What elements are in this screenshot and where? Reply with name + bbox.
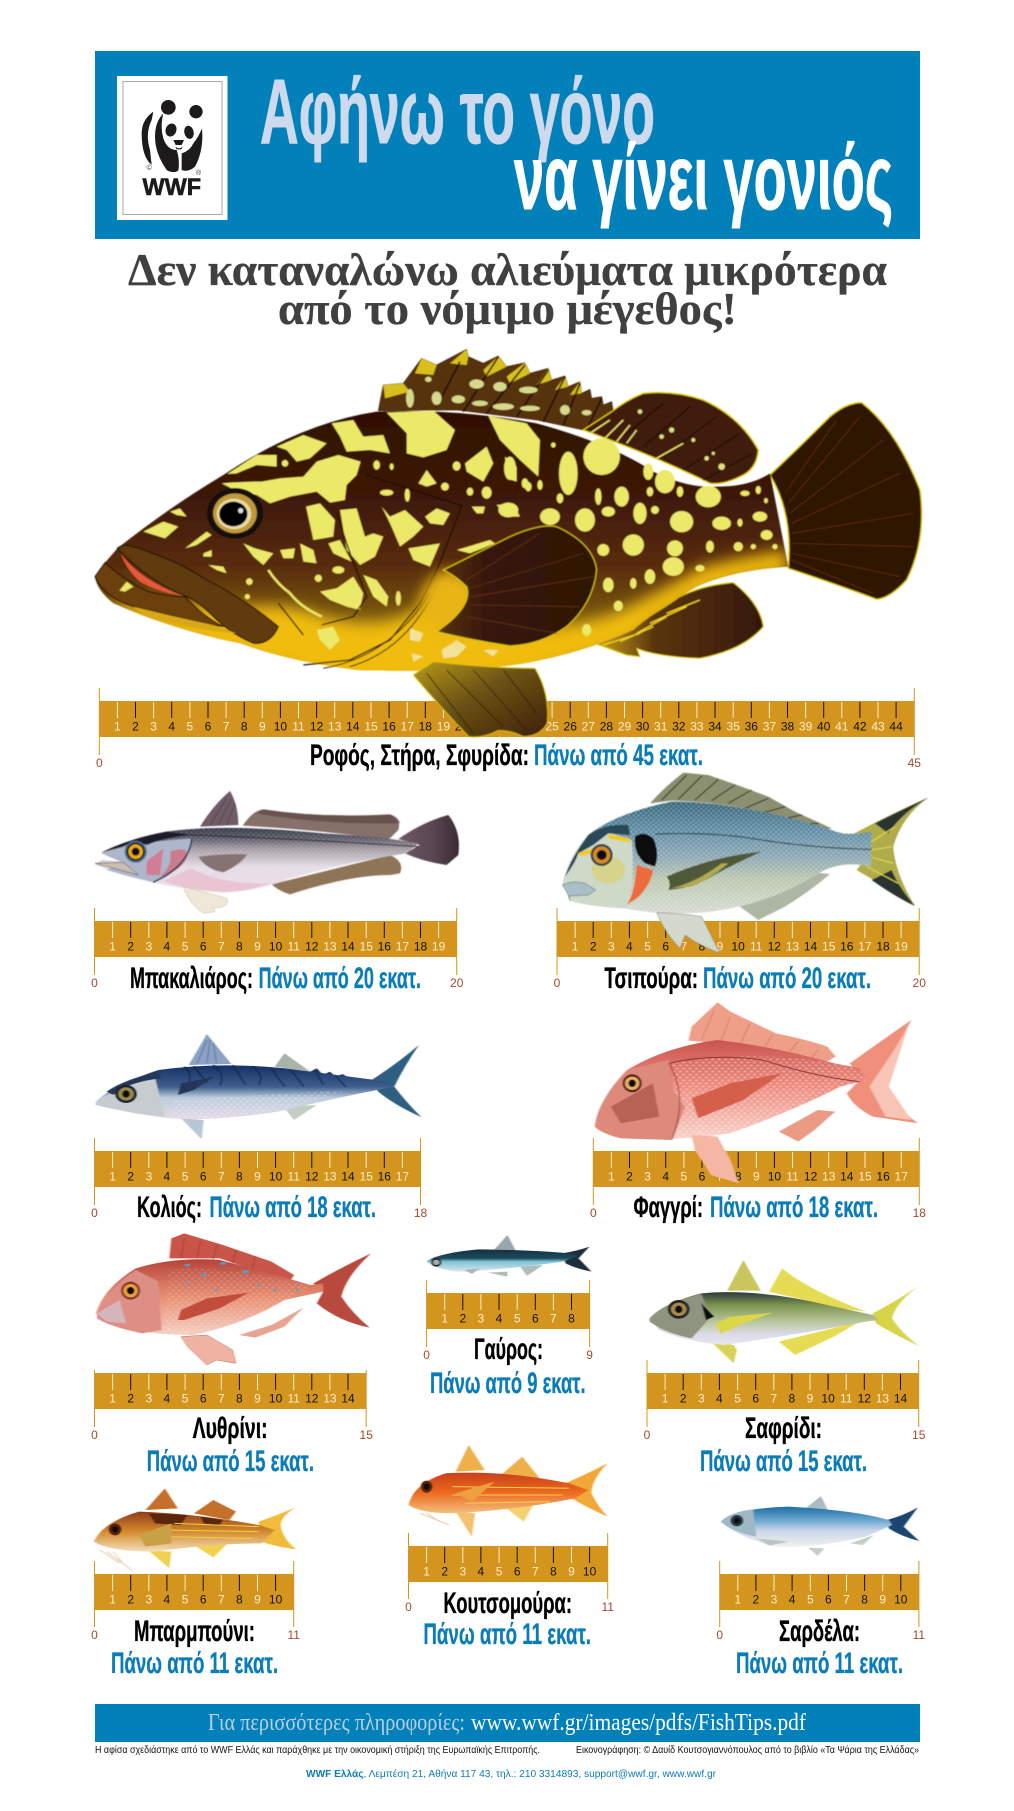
ruler: scad 15 cm: 15 <box>912 1428 926 1442</box>
ruler: red snapper 15 cm: 8 <box>236 1392 243 1406</box>
ruler: scad 15 cm: 0 <box>644 1428 651 1442</box>
ruler: 45 cm: 26 <box>564 720 577 734</box>
ruler: 45 cm: 2 <box>132 720 139 734</box>
ruler: 45 cm: 37 <box>763 720 776 734</box>
ruler: anchovy 9 cm: 5 <box>514 1312 521 1326</box>
subtitle <box>128 245 887 334</box>
ruler: sea bream 20 cm: 2 <box>590 940 597 954</box>
title line 1: Αφήνω το γόνο <box>260 61 655 163</box>
ruler: red mullet 11 cm: 2 <box>127 1592 134 1606</box>
ruler: red porgy 18 cm: 17 <box>895 1170 908 1184</box>
ruler: 45 cm: 6 <box>205 720 212 734</box>
ruler: red porgy 18 cm: 4 <box>662 1170 669 1184</box>
ruler: scad 15 cm: 9 <box>807 1392 814 1406</box>
ruler: red porgy 18 cm: 2 <box>626 1170 633 1184</box>
ruler: 45 cm: 31 <box>654 720 668 734</box>
ruler: mackerel 18 cm: 16 <box>378 1170 391 1184</box>
ruler: 45 cm: 1 <box>114 720 121 734</box>
ruler: red porgy 18 cm: 13 <box>822 1170 836 1184</box>
ruler: mackerel 18 cm: 3 <box>145 1170 152 1184</box>
label: striped mullet: Κουτσομούρα: <box>443 1587 572 1620</box>
label: striped mullet: Πάνω από 11 εκατ. <box>423 1618 591 1651</box>
ruler: red snapper 15 cm: 1 <box>109 1392 116 1406</box>
WWF logo: WWF <box>142 174 201 201</box>
ruler: anchovy 9 cm: 7 <box>550 1312 557 1326</box>
ruler: 45 cm: 21 <box>473 720 487 734</box>
ruler: hake 20 cm: 11 <box>287 940 300 954</box>
ruler: red mullet 11 cm: 11 <box>287 1628 300 1642</box>
ruler: mackerel 18 cm: 12 <box>305 1170 319 1184</box>
ruler: anchovy 9 cm: 8 <box>568 1312 575 1326</box>
ruler: hake 20 cm: 3 <box>145 940 152 954</box>
label: red porgy: Φαγγρί: <box>634 1191 703 1224</box>
ruler: red mullet 11 cm: 4 <box>164 1592 171 1606</box>
ruler: red mullet 11 cm: 6 <box>200 1592 207 1606</box>
ruler: scad 15 cm: 8 <box>789 1392 796 1406</box>
ruler: 45 cm: 40 <box>817 720 831 734</box>
ruler: red snapper 15 cm: 5 <box>182 1392 189 1406</box>
ruler: hake 20 cm <box>91 908 464 990</box>
ruler: hake 20 cm: 7 <box>218 940 225 954</box>
ruler: sardine 11 cm: 10 <box>894 1592 908 1606</box>
ruler: scad 15 cm: 6 <box>752 1392 759 1406</box>
ruler: mackerel 18 cm: 2 <box>127 1170 134 1184</box>
label: sea bream <box>604 962 871 995</box>
ruler: anchovy 9 cm: 9 <box>586 1348 593 1362</box>
footer banner: www.wwf.gr/images/pdfs/FishTips.pdf <box>471 1710 806 1736</box>
ruler: red snapper 15 cm: 15 <box>360 1428 373 1442</box>
ruler: scad 15 cm: 12 <box>858 1392 871 1406</box>
ruler: sea bream 20 cm: 3 <box>608 940 615 954</box>
ruler: sea bream 20 cm: 14 <box>804 940 817 954</box>
label: striped mullet <box>423 1587 591 1651</box>
ruler: red porgy 18 cm: 16 <box>876 1170 890 1184</box>
label: scad: Σαφρίδι: <box>745 1412 822 1445</box>
ruler: red snapper 15 cm: 2 <box>127 1392 134 1406</box>
ruler: 45 cm: 33 <box>690 720 704 734</box>
ruler: red porgy 18 cm: 7 <box>717 1170 724 1184</box>
footer banner <box>95 1704 920 1742</box>
ruler: mackerel 18 cm: 0 <box>91 1206 98 1220</box>
ruler: red snapper 15 cm: 0 <box>91 1428 98 1442</box>
label: sea bream: Πάνω από 20 εκατ. <box>703 962 871 995</box>
ruler: anchovy 9 cm: 6 <box>532 1312 539 1326</box>
ruler: mackerel 18 cm: 18 <box>414 1206 427 1220</box>
ruler: striped mullet 11 cm: 7 <box>532 1564 539 1578</box>
ruler: red porgy 18 cm: 9 <box>753 1170 760 1184</box>
ruler: scad 15 cm: 1 <box>662 1392 669 1406</box>
label: sardine <box>736 1615 903 1680</box>
ruler: scad 15 cm: 10 <box>821 1392 835 1406</box>
ruler: 45 cm: 23 <box>509 720 523 734</box>
ruler: scad 15 cm: 3 <box>698 1392 705 1406</box>
ruler: hake 20 cm: 10 <box>269 940 283 954</box>
ruler: striped mullet 11 cm: 6 <box>514 1564 521 1578</box>
ruler: hake 20 cm: 18 <box>414 940 427 954</box>
fish: sea bream <box>562 773 928 953</box>
ruler: sea bream 20 cm: 16 <box>840 940 854 954</box>
ruler: scad 15 cm: 14 <box>894 1392 907 1406</box>
fish: red mullet <box>94 1488 296 1571</box>
ruler: sardine 11 cm: 1 <box>734 1592 741 1606</box>
ruler: sea bream 20 cm: 20 <box>913 976 926 990</box>
footer banner: Για περισσότερες πληροφορίες: <box>208 1710 465 1736</box>
ruler: 45 cm: 29 <box>618 720 631 734</box>
ruler: red snapper 15 cm: 12 <box>305 1392 319 1406</box>
fish: mackerel <box>96 1034 421 1139</box>
ruler: 45 cm: 14 <box>346 720 360 734</box>
label: mackerel: Κολιός: <box>137 1191 202 1224</box>
ruler: sea bream 20 cm: 0 <box>554 976 561 990</box>
ruler: red porgy 18 cm: 6 <box>699 1170 706 1184</box>
ruler: hake 20 cm: 5 <box>182 940 189 954</box>
ruler: sea bream 20 cm: 15 <box>822 940 836 954</box>
ruler: mackerel 18 cm: 1 <box>109 1170 116 1184</box>
ruler: mackerel 18 cm: 14 <box>341 1170 355 1184</box>
ruler: hake 20 cm: 4 <box>164 940 171 954</box>
ruler: 45 cm: 10 <box>274 720 287 734</box>
ruler: sea bream 20 cm: 1 <box>572 940 579 954</box>
ruler: mackerel 18 cm: 17 <box>396 1170 409 1184</box>
ruler: striped mullet 11 cm: 2 <box>441 1564 448 1578</box>
ruler: red snapper 15 cm: 11 <box>287 1392 300 1406</box>
ruler: striped mullet 11 cm: 8 <box>550 1564 557 1578</box>
label: hake: Πάνω από 20 εκατ. <box>259 962 421 995</box>
ruler: 45 cm: 7 <box>223 720 230 734</box>
ruler: 45 cm: 39 <box>799 720 813 734</box>
ruler: striped mullet 11 cm: 4 <box>478 1564 485 1578</box>
fish: hake <box>95 791 459 913</box>
ruler: hake 20 cm: 9 <box>254 940 261 954</box>
fish: sardine <box>721 1496 919 1556</box>
ruler: 45 cm: 35 <box>727 720 740 734</box>
ruler: red porgy 18 cm: 11 <box>786 1170 799 1184</box>
ruler: striped mullet 11 cm: 1 <box>423 1564 430 1578</box>
ruler: sea bream 20 cm: 6 <box>662 940 669 954</box>
fish: striped mullet <box>409 1445 608 1537</box>
label: anchovy: Γαύρος: <box>474 1333 543 1366</box>
ruler: 45 cm: 36 <box>745 720 758 734</box>
subtitle: Δεν καταναλώνω αλιεύματα μικρότερα <box>128 245 887 295</box>
ruler: sea bream 20 cm: 7 <box>680 940 687 954</box>
label: red snapper <box>147 1412 314 1478</box>
label: red snapper: Λυθρίνι: <box>193 1412 268 1445</box>
ruler: striped mullet 11 cm: 10 <box>583 1564 597 1578</box>
ruler: hake 20 cm: 16 <box>378 940 391 954</box>
label: red porgy <box>634 1191 878 1224</box>
ruler: sardine 11 cm: 6 <box>825 1592 832 1606</box>
header banner <box>95 51 920 239</box>
ruler: hake 20 cm: 12 <box>305 940 319 954</box>
ruler: anchovy 9 cm: 4 <box>496 1312 503 1326</box>
ruler: sea bream 20 cm: 17 <box>858 940 872 954</box>
ruler: sea bream 20 cm: 13 <box>786 940 799 954</box>
ruler: red snapper 15 cm <box>91 1370 373 1442</box>
WWF logo <box>117 76 228 220</box>
ruler: sardine 11 cm: 5 <box>807 1592 814 1606</box>
ruler: red porgy 18 cm: 10 <box>768 1170 781 1184</box>
ruler: mackerel 18 cm: 11 <box>287 1170 300 1184</box>
ruler: 45 cm: 20 <box>455 720 468 734</box>
ruler: hake 20 cm: 19 <box>432 940 446 954</box>
ruler: red porgy 18 cm: 14 <box>840 1170 854 1184</box>
ruler: 45 cm: 38 <box>781 720 794 734</box>
WWF logo: ® <box>196 169 202 177</box>
credit: illustration: Εικονογράφηση: © Δαυίδ Κουτσογιαννόπουλος από το βιβλίο «Τα Ψάρια της Ελλάδας» <box>576 1744 919 1756</box>
ruler: red snapper 15 cm: 14 <box>341 1392 355 1406</box>
ruler: red snapper 15 cm: 3 <box>145 1392 152 1406</box>
label: red mullet: Μπαρμπούνι: <box>134 1615 255 1648</box>
ruler: red snapper 15 cm: 7 <box>218 1392 225 1406</box>
ruler: scad 15 cm <box>644 1360 926 1442</box>
ruler: scad 15 cm: 11 <box>840 1392 853 1406</box>
ruler: sea bream 20 cm: 18 <box>876 940 890 954</box>
ruler: anchovy 9 cm: 0 <box>423 1348 430 1362</box>
ruler: mackerel 18 cm: 6 <box>200 1170 207 1184</box>
label: hake: Μπακαλιάρος: <box>130 962 253 995</box>
ruler: hake 20 cm: 2 <box>127 940 134 954</box>
ruler: sardine 11 cm: 7 <box>843 1592 850 1606</box>
ruler: 45 cm: 9 <box>259 720 266 734</box>
ruler: scad 15 cm: 5 <box>734 1392 741 1406</box>
ruler: mackerel 18 cm: 7 <box>218 1170 225 1184</box>
ruler: sea bream 20 cm: 4 <box>626 940 633 954</box>
ruler: sea bream 20 cm: 12 <box>768 940 781 954</box>
ruler: red snapper 15 cm: 4 <box>164 1392 171 1406</box>
ruler: mackerel 18 cm: 10 <box>269 1170 283 1184</box>
ruler: red snapper 15 cm: 10 <box>269 1392 283 1406</box>
ruler: sea bream 20 cm <box>554 908 926 990</box>
ruler: 45 cm: 3 <box>150 720 157 734</box>
ruler: sardine 11 cm: 11 <box>913 1628 925 1642</box>
ruler: mackerel 18 cm: 9 <box>254 1170 261 1184</box>
ruler: sardine 11 cm: 4 <box>789 1592 796 1606</box>
ruler: sea bream 20 cm: 19 <box>894 940 908 954</box>
ruler: mackerel 18 cm: 15 <box>360 1170 373 1184</box>
ruler: red mullet 11 cm: 5 <box>182 1592 189 1606</box>
ruler: striped mullet 11 cm: 9 <box>568 1564 575 1578</box>
ruler: 45 cm: 15 <box>364 720 378 734</box>
contact line: WWF Ελλάς, Λεμπέση 21, Αθήνα 117 43, τηλ.: 210 3314893, support@wwf.gr, www.wwf.gr <box>306 1768 717 1780</box>
ruler: scad 15 cm: 7 <box>770 1392 777 1406</box>
ruler: 45 cm: 44 <box>889 720 903 734</box>
fish: red snapper <box>96 1233 371 1365</box>
label: anchovy <box>430 1333 586 1400</box>
ruler: hake 20 cm: 17 <box>396 940 409 954</box>
ruler: 45 cm: 32 <box>672 720 686 734</box>
ruler: mackerel 18 cm: 4 <box>164 1170 171 1184</box>
ruler: anchovy 9 cm: 3 <box>478 1312 485 1326</box>
ruler: red porgy 18 cm: 15 <box>858 1170 872 1184</box>
ruler: hake 20 cm: 14 <box>341 940 355 954</box>
ruler: red mullet 11 cm: 3 <box>145 1592 152 1606</box>
ruler: hake 20 cm: 20 <box>450 976 464 990</box>
fish: anchovy <box>427 1235 591 1277</box>
fish: scad <box>650 1260 920 1363</box>
ruler: sea bream 20 cm: 10 <box>731 940 745 954</box>
ruler: red mullet 11 cm: 10 <box>269 1592 283 1606</box>
ruler: red mullet 11 cm <box>91 1561 300 1642</box>
ruler: mackerel 18 cm: 8 <box>236 1170 243 1184</box>
ruler: red porgy 18 cm: 1 <box>608 1170 615 1184</box>
ruler: red snapper 15 cm: 9 <box>254 1392 261 1406</box>
ruler: red porgy 18 cm: 0 <box>590 1206 597 1220</box>
ruler: hake 20 cm: 15 <box>360 940 373 954</box>
ruler: 45 cm <box>96 688 921 770</box>
credit: poster funding: Η αφίσα σχεδιάστηκε από το WWF Ελλάς και παράχθηκε με την οικονομική στήριξη της Ευρωπαϊκής Επιτροπής. <box>95 1744 540 1756</box>
label: sardine: Πάνω από 11 εκατ. <box>736 1647 903 1680</box>
ruler: striped mullet 11 cm: 5 <box>496 1564 503 1578</box>
ruler: anchovy 9 cm: 1 <box>441 1312 448 1326</box>
ruler: 45 cm: 45 <box>908 756 921 770</box>
ruler: red mullet 11 cm: 8 <box>236 1592 243 1606</box>
ruler: 45 cm: 34 <box>708 720 722 734</box>
ruler: sardine 11 cm: 0 <box>716 1628 723 1642</box>
label: mackerel: Πάνω από 18 εκατ. <box>209 1191 376 1224</box>
ruler: sardine 11 cm: 9 <box>879 1592 886 1606</box>
ruler: hake 20 cm: 1 <box>109 940 116 954</box>
ruler: scad 15 cm: 2 <box>680 1392 687 1406</box>
ruler: 45 cm: 25 <box>545 720 559 734</box>
ruler: 45 cm: 11 <box>292 720 305 734</box>
ruler: 45 cm: 30 <box>636 720 650 734</box>
ruler: sardine 11 cm <box>716 1561 925 1642</box>
ruler: sardine 11 cm: 2 <box>753 1592 760 1606</box>
label: grouper: Ροφός, Στήρα, Σφυρίδα: <box>310 739 529 772</box>
ruler: striped mullet 11 cm: 3 <box>459 1564 466 1578</box>
ruler: red porgy 18 cm: 3 <box>644 1170 651 1184</box>
ruler: sea bream 20 cm: 9 <box>717 940 724 954</box>
ruler: red porgy 18 cm: 18 <box>913 1206 926 1220</box>
label: red porgy: Πάνω από 18 εκατ. <box>710 1191 878 1224</box>
ruler: 45 cm: 42 <box>853 720 867 734</box>
ruler: 45 cm: 17 <box>401 720 414 734</box>
ruler: red porgy 18 cm: 5 <box>681 1170 688 1184</box>
ruler: scad 15 cm: 13 <box>876 1392 889 1406</box>
label: red mullet: Πάνω από 11 εκατ. <box>111 1647 278 1680</box>
ruler: 45 cm: 13 <box>328 720 342 734</box>
ruler: red porgy 18 cm: 12 <box>804 1170 818 1184</box>
ruler: sardine 11 cm: 3 <box>771 1592 778 1606</box>
ruler: scad 15 cm: 4 <box>716 1392 723 1406</box>
ruler: mackerel 18 cm: 5 <box>182 1170 189 1184</box>
label: mackerel <box>137 1191 376 1224</box>
ruler: sardine 11 cm: 8 <box>861 1592 868 1606</box>
ruler: sea bream 20 cm: 11 <box>750 940 763 954</box>
ruler: 45 cm: 12 <box>310 720 324 734</box>
label: sea bream: Τσιπούρα: <box>604 962 698 995</box>
ruler: red mullet 11 cm: 7 <box>218 1592 225 1606</box>
ruler: red snapper 15 cm: 6 <box>200 1392 207 1406</box>
ruler: 45 cm: 27 <box>582 720 595 734</box>
ruler: 45 cm: 24 <box>527 720 541 734</box>
ruler: red mullet 11 cm: 9 <box>254 1592 261 1606</box>
ruler: 45 cm: 16 <box>382 720 396 734</box>
ruler: 45 cm: 41 <box>835 720 849 734</box>
label: anchovy: Πάνω από 9 εκατ. <box>430 1367 586 1400</box>
ruler: 45 cm: 22 <box>491 720 505 734</box>
ruler: red mullet 11 cm: 0 <box>91 1628 98 1642</box>
ruler: sea bream 20 cm: 8 <box>699 940 706 954</box>
ruler: 45 cm: 0 <box>96 756 103 770</box>
label: red snapper: Πάνω από 15 εκατ. <box>147 1445 314 1478</box>
ruler: anchovy 9 cm: 2 <box>459 1312 466 1326</box>
ruler: hake 20 cm: 0 <box>91 976 98 990</box>
ruler: red porgy 18 cm: 8 <box>735 1170 742 1184</box>
ruler: 45 cm: 43 <box>871 720 885 734</box>
ruler: sea bream 20 cm: 5 <box>644 940 651 954</box>
ruler: striped mullet 11 cm: 11 <box>601 1600 614 1614</box>
fish: grouper <box>95 349 922 737</box>
ruler: striped mullet 11 cm: 0 <box>405 1600 412 1614</box>
ruler: 45 cm: 18 <box>419 720 432 734</box>
label: red mullet <box>111 1615 278 1680</box>
ruler: 45 cm: 8 <box>241 720 248 734</box>
label: grouper: Πάνω από 45 εκατ. <box>534 739 703 772</box>
ruler: hake 20 cm: 8 <box>236 940 243 954</box>
ruler: red mullet 11 cm: 1 <box>109 1592 116 1606</box>
ruler: mackerel 18 cm: 13 <box>323 1170 337 1184</box>
ruler: 45 cm: 4 <box>168 720 175 734</box>
label: scad <box>700 1412 867 1478</box>
WWF logo: © <box>146 164 152 172</box>
subtitle: από το νόμιμο μέγεθος! <box>278 284 737 334</box>
ruler: hake 20 cm: 6 <box>200 940 207 954</box>
ruler: red snapper 15 cm: 13 <box>323 1392 337 1406</box>
fish: red porgy <box>595 1002 918 1183</box>
ruler: anchovy 9 cm <box>423 1280 593 1362</box>
ruler: 45 cm: 19 <box>437 720 450 734</box>
ruler: striped mullet 11 cm <box>405 1533 614 1614</box>
ruler: 45 cm: 5 <box>187 720 194 734</box>
ruler: hake 20 cm: 13 <box>323 940 337 954</box>
ruler: 45 cm: 28 <box>600 720 613 734</box>
label: sardine: Σαρδέλα: <box>779 1615 860 1648</box>
label: scad: Πάνω από 15 εκατ. <box>700 1445 867 1478</box>
ruler: red porgy 18 cm <box>590 1138 926 1220</box>
ruler: mackerel 18 cm <box>91 1138 427 1220</box>
